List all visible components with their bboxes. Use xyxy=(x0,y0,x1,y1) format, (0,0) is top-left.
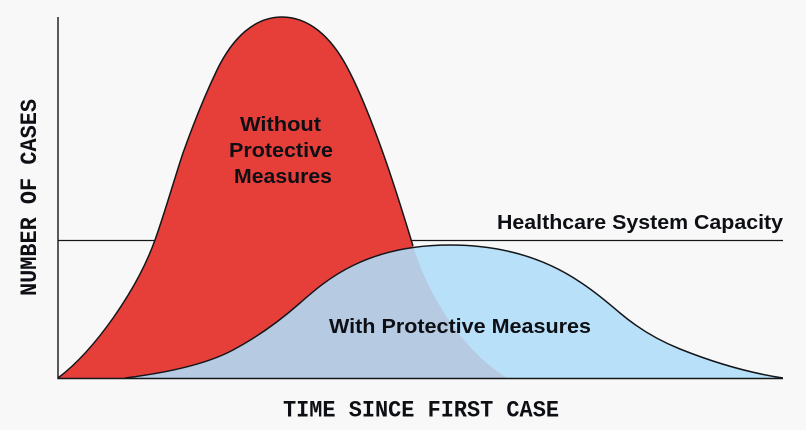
label: without protective measures: Measures xyxy=(234,166,332,188)
curve: without protective measures xyxy=(58,17,507,378)
y axis title: NUMBER OF CASES xyxy=(17,99,43,296)
overlap of the two curves xyxy=(134,248,506,378)
label: without protective measures: Protective xyxy=(229,140,333,162)
curve: with protective measures xyxy=(125,245,783,378)
label: without protective measures: Without xyxy=(240,114,321,136)
x axis title: TIME SINCE FIRST CASE xyxy=(283,398,559,424)
label: healthcare system capacity: Healthcare System Capacity xyxy=(497,212,784,234)
curve outline: with protective measures xyxy=(125,245,783,378)
axes xyxy=(58,17,783,378)
curve outline: without protective measures xyxy=(58,17,413,378)
label: without protective measures xyxy=(229,114,333,188)
capacity line xyxy=(58,240,783,242)
label: with protective measures: With Protective Measures xyxy=(329,316,591,338)
